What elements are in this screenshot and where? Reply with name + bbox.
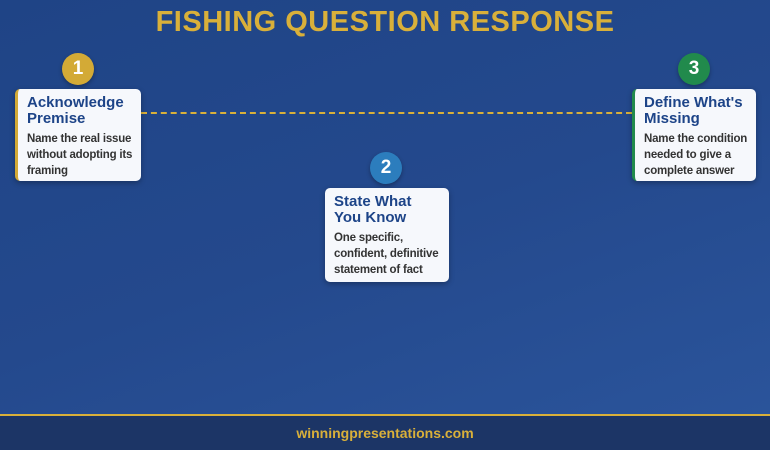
- card: state what you know: State What: [334, 193, 412, 210]
- icon: number 3: [678, 53, 710, 85]
- card: state what you know: You Know: [334, 209, 406, 226]
- card: acknowledge premise: Premise: [27, 110, 85, 127]
- card: state what you know: confident, definitive: [334, 248, 438, 260]
- card: define what's missing: [632, 89, 756, 181]
- icon: number 1: 1: [73, 58, 83, 79]
- card: acknowledge premise: Acknowledge: [27, 94, 124, 111]
- card: define what's missing: complete answer: [644, 165, 734, 177]
- card: acknowledge premise: framing: [27, 165, 68, 177]
- card: acknowledge premise: Name the real issue: [27, 133, 131, 145]
- icon: number 2: [370, 152, 402, 184]
- icon: number 3: 3: [689, 58, 699, 79]
- icon: number 1: [62, 53, 94, 85]
- card: define what's missing: Name the condition: [644, 133, 747, 145]
- icon: number 2: 2: [381, 157, 391, 178]
- title: FISHING QUESTION RESPONSE: [156, 6, 614, 38]
- card: state what you know: statement of fact: [334, 264, 423, 276]
- card: state what you know: [325, 188, 449, 282]
- card: acknowledge premise: [15, 89, 141, 181]
- footer: [0, 414, 770, 450]
- card: define what's missing: Missing: [644, 110, 700, 127]
- card: define what's missing: needed to give a: [644, 149, 731, 161]
- footer: winningpresentations.com: [296, 425, 474, 441]
- card: define what's missing: Define What's: [644, 94, 743, 111]
- connector: dashed line: [141, 112, 632, 114]
- card: acknowledge premise: without adopting its: [27, 149, 132, 161]
- card: state what you know: One specific,: [334, 232, 403, 244]
